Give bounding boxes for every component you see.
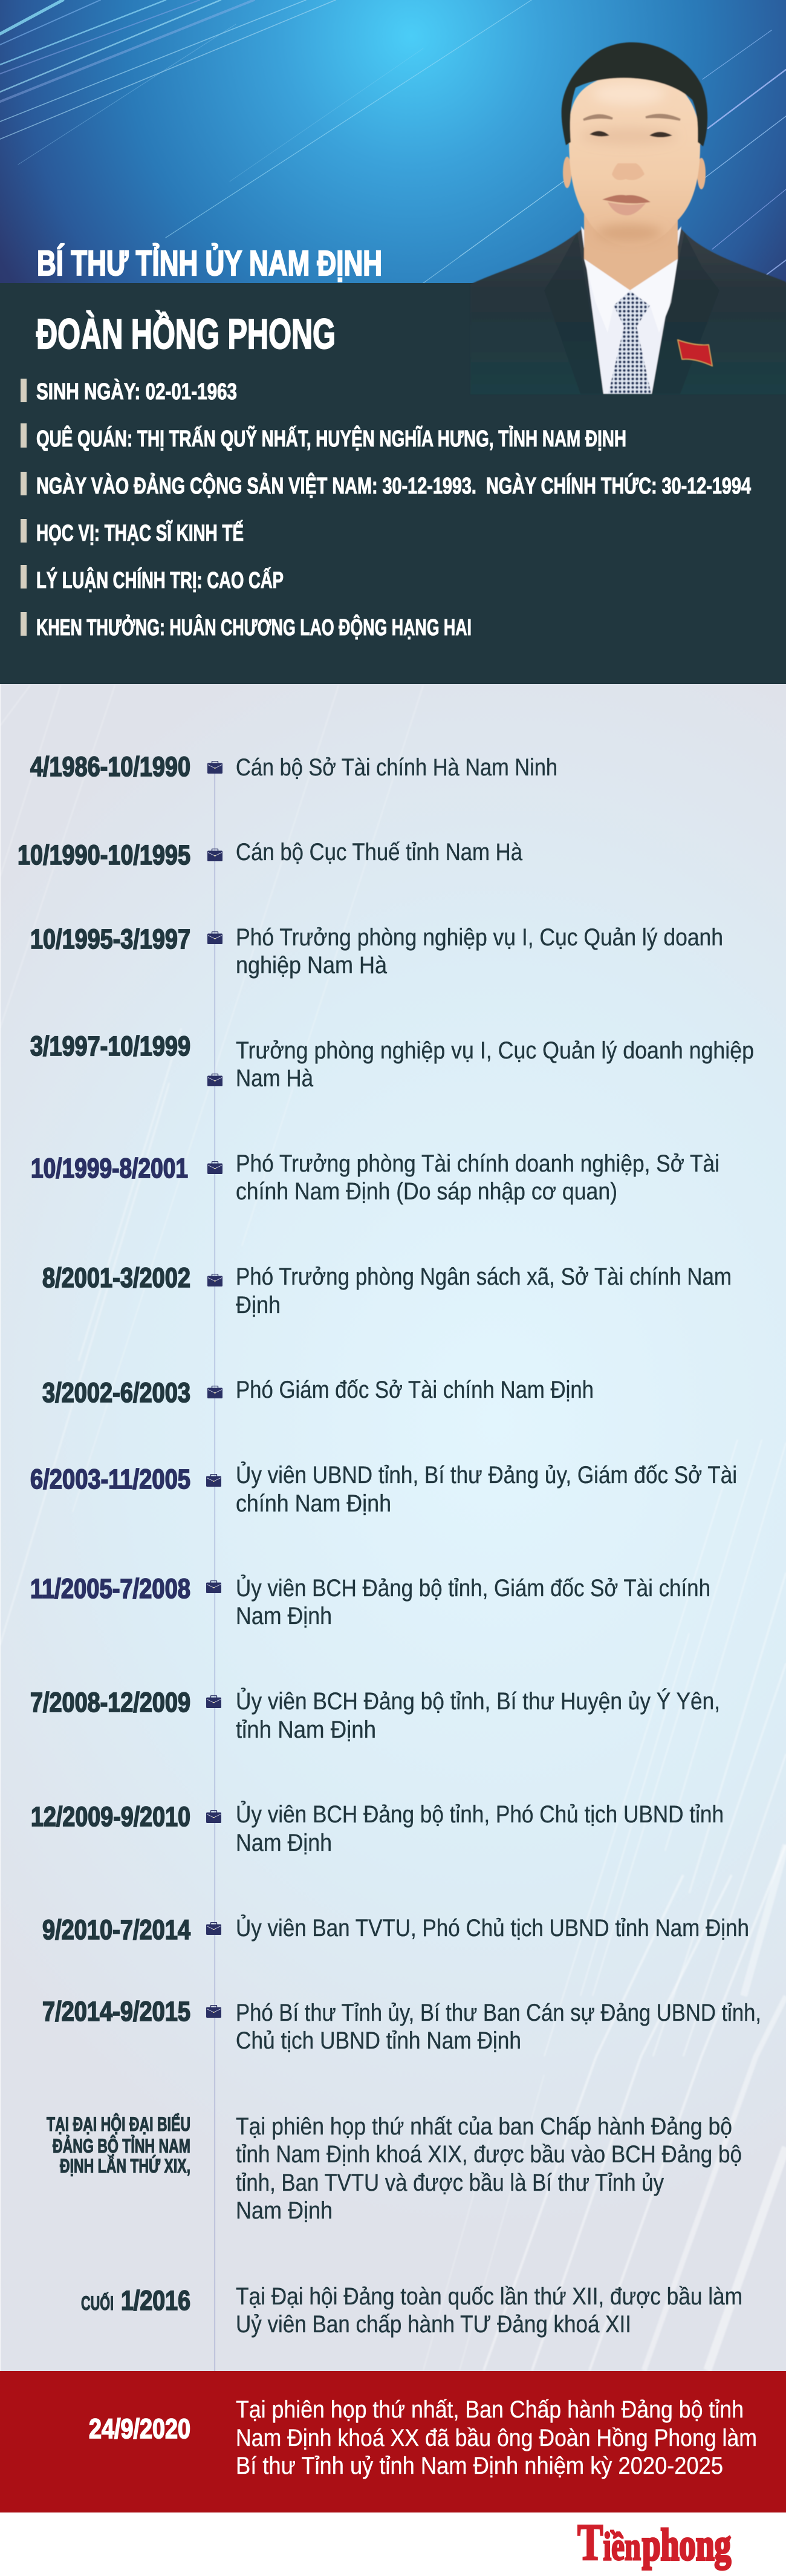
entry: 12/2009-9/2010: 12/2009-9/2010	[31, 1801, 190, 1832]
mouth	[602, 195, 651, 203]
jacket	[470, 227, 786, 394]
entry: 10/1999-8/2001	[31, 1150, 719, 1205]
logo: Tiền Phong: phong	[642, 2520, 731, 2570]
nose	[612, 163, 645, 180]
entry: 11/2005-7/2008	[30, 1573, 710, 1629]
entry: 7/2014-9/2015	[42, 1996, 761, 2054]
lapel left	[544, 232, 603, 394]
entry: 3/1997-10/1999: 3/1997-10/1999	[30, 1031, 190, 1061]
entry: provincial congress XIX: TẠI ĐẠI HỘI ĐẠI BIỂU	[47, 2113, 190, 2135]
entry: 4/1986-10/1990: Cán bộ Sở Tài chính Hà Nam Ninh	[236, 754, 557, 781]
entry: 3/1997-10/1999: Nam Hà	[236, 1065, 314, 1092]
entry: provincial congress XIX: tỉnh, Ban TVTU và được bầu là Bí thư Tỉnh ủy	[236, 2170, 664, 2196]
collar left	[584, 259, 630, 333]
political theory: LÝ LUẬN CHÍNH TRỊ: CAO CẤP	[36, 567, 284, 593]
entry: 8/2001-3/2002: Định	[236, 1292, 281, 1319]
entry: 6/2003-11/2005: chính Nam Định	[236, 1490, 391, 1517]
entry: 12/2009-9/2010	[31, 1800, 724, 1856]
entry: 10/1990-10/1995: 10/1990-10/1995	[18, 840, 190, 870]
entry: end of 1/2016: CUỐI	[81, 2292, 114, 2314]
lapel right	[652, 232, 719, 394]
ears	[563, 157, 706, 189]
logo: Tiền Phong: Tiền	[577, 2513, 641, 2571]
collar right	[630, 259, 678, 333]
entry: 7/2008-12/2009: 7/2008-12/2009	[30, 1687, 190, 1718]
entry: provincial congress XIX: ĐẢNG BỘ TỈNH NAM	[53, 2135, 190, 2157]
entry: 12/2009-9/2010: Nam Định	[236, 1830, 332, 1856]
face	[569, 73, 700, 247]
entry: provincial congress XIX: Nam Định	[236, 2197, 333, 2224]
entry: 3/2002-6/2003: 3/2002-6/2003	[42, 1377, 190, 1408]
birth date: SINH NGÀY: 02-01-1963	[36, 378, 237, 405]
face shading	[580, 83, 677, 241]
entry: 8/2001-3/2002	[42, 1262, 732, 1319]
panel: red highlight 24/9/2020: 24/9/2020	[89, 2413, 190, 2444]
entry: 12/2009-9/2010: Ủy viên BCH Đảng bộ tỉnh, Phó Chủ tịch UBND tỉnh	[236, 1800, 724, 1828]
tie	[608, 291, 651, 394]
entry: 7/2008-12/2009: tỉnh Nam Định	[236, 1717, 376, 1743]
entry: 6/2003-11/2005	[30, 1461, 737, 1517]
panel: timeline background	[0, 684, 786, 2371]
entry: 3/2002-6/2003: Phó Giám đốc Sở Tài chính Nam Định	[236, 1377, 594, 1403]
panel: dark profile background	[0, 283, 786, 684]
portrait photo	[470, 42, 786, 394]
entry: 10/1995-3/1997	[30, 924, 723, 979]
entry: 3/2002-6/2003	[42, 1377, 594, 1408]
entry: 10/1999-8/2001: Phó Trưởng phòng Tài chính doanh nghiệp, Sở Tài	[236, 1150, 719, 1177]
entry: 7/2008-12/2009: Ủy viên BCH Đảng bộ tỉnh, Bí thư Huyện ủy Ý Yên,	[236, 1687, 720, 1715]
logo: Tiền Phong	[577, 2513, 731, 2571]
entry: 10/1990-10/1995: Cán bộ Cục Thuế tỉnh Nam Hà	[236, 839, 523, 866]
title: position: BÍ THƯ TỈNH ỦY NAM ĐỊNH	[37, 244, 382, 283]
entry: 11/2005-7/2008: Ủy viên BCH Đảng bộ tỉnh, Giám đốc Sở Tài chính	[236, 1574, 710, 1602]
bio list	[21, 378, 751, 641]
entry: 11/2005-7/2008: Nam Định	[236, 1603, 332, 1629]
entry: 3/1997-10/1999	[30, 1031, 754, 1092]
eyebrows	[583, 115, 680, 120]
entry: 7/2014-9/2015: Chủ tịch UBND tỉnh Nam Định	[236, 2027, 521, 2054]
panel: red highlight 24/9/2020: Bí thư Tỉnh uỷ tỉnh Nam Định nhiệm kỳ 2020-2025	[236, 2453, 723, 2479]
entry: 9/2010-7/2014: 9/2010-7/2014	[42, 1914, 190, 1945]
entry: 10/1999-8/2001: 10/1999-8/2001	[31, 1153, 188, 1184]
shirt	[581, 226, 681, 394]
hair	[562, 42, 707, 146]
entry: 11/2005-7/2008: 11/2005-7/2008	[30, 1573, 190, 1604]
entry: 7/2014-9/2015: 7/2014-9/2015	[42, 1996, 190, 2027]
panel: red highlight 24/9/2020	[0, 2371, 786, 2512]
entry: end of 1/2016	[81, 2283, 742, 2338]
entry: 4/1986-10/1990: 4/1986-10/1990	[30, 751, 190, 782]
lower lip	[608, 202, 646, 215]
entry: provincial congress XIX: Tại phiên họp thứ nhất của ban Chấp hành Đảng bộ	[236, 2113, 732, 2140]
bullet bars	[21, 379, 27, 636]
panel: blue header background	[0, 0, 786, 283]
party pin	[678, 340, 712, 366]
entry: provincial congress XIX: ĐỊNH LẦN THỨ XIX,	[60, 2155, 190, 2177]
neck	[584, 206, 678, 290]
entry: 9/2010-7/2014	[42, 1914, 749, 1945]
entry: 6/2003-11/2005: 6/2003-11/2005	[30, 1464, 190, 1495]
entry: 10/1990-10/1995	[18, 839, 523, 870]
entry: 10/1999-8/2001: chính Nam Định (Do sáp nhập cơ quan)	[236, 1178, 617, 1205]
entry: 7/2008-12/2009	[30, 1687, 720, 1743]
entry: end of 1/2016: 1/2016	[121, 2285, 190, 2316]
eyes	[590, 131, 672, 137]
awards: KHEN THƯỞNG: HUÂN CHƯƠNG LAO ĐỘNG HẠNG HAI	[36, 613, 472, 641]
title: name: ĐOÀN HỒNG PHONG	[36, 310, 336, 357]
degree: HỌC VỊ: THẠC SĨ KINH TẾ	[36, 520, 244, 546]
entry: 4/1986-10/1990	[30, 751, 557, 782]
entry: provincial congress XIX	[47, 2113, 742, 2224]
entry: 10/1995-3/1997: Phó Trưởng phòng nghiệp vụ I, Cục Quản lý doanh	[236, 924, 723, 951]
entry: 8/2001-3/2002: 8/2001-3/2002	[42, 1262, 190, 1293]
entry: 10/1995-3/1997: nghiệp Nam Hà	[236, 952, 388, 979]
entry: end of 1/2016: Uỷ viên Ban chấp hành TƯ Đảng khoá XII	[236, 2311, 631, 2338]
entry: 10/1995-3/1997: 10/1995-3/1997	[30, 924, 190, 954]
